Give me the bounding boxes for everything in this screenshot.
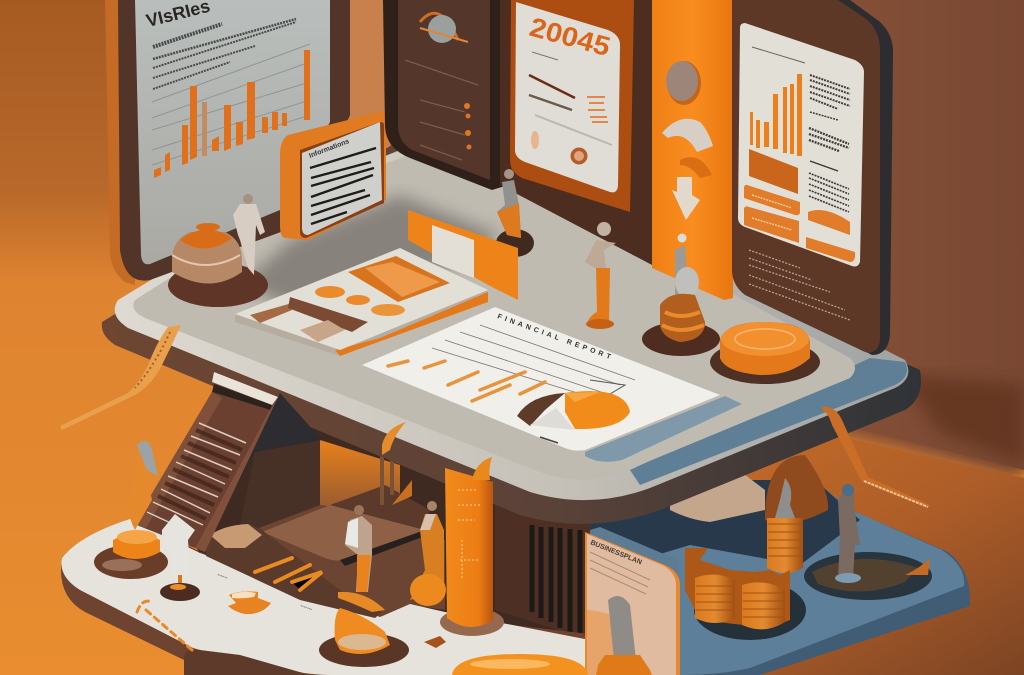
beige box [670, 474, 765, 522]
book with text: BUSINESSPLAN [589, 539, 643, 566]
stair band [134, 392, 270, 548]
control console [206, 524, 382, 618]
lower platform [61, 455, 970, 675]
interior below upper platform [200, 393, 600, 650]
monitor text lines [153, 19, 296, 89]
icon: curved arrow [662, 119, 713, 178]
document heading: FINANCIAL REPORT [496, 313, 612, 361]
stair dark side [194, 393, 322, 553]
ribbon: left [60, 325, 181, 430]
figures and buttons on white deck: ••••••• [299, 603, 313, 613]
dark wall [238, 440, 320, 535]
orange ribbons [60, 325, 930, 508]
vent grille [532, 525, 580, 638]
coin tray with coins [685, 548, 806, 640]
orange lit wall [320, 440, 400, 520]
document with pie chart [362, 307, 720, 451]
book with text [585, 527, 680, 675]
button: left orange stack [94, 530, 168, 579]
ribbon: right [822, 407, 930, 508]
figure: standing man center [585, 222, 616, 329]
panel: left monitor [105, 0, 350, 285]
grey bottle on orange base [596, 596, 652, 675]
figures and buttons on top deck [168, 169, 820, 451]
report year: 20045 [526, 12, 613, 62]
figure: orange walker near top panel [496, 169, 534, 257]
panel: small orange note card: Informations [308, 138, 350, 160]
panel: small orange note card [280, 112, 386, 240]
button: central orange dome [319, 608, 409, 667]
lower platform white deck [61, 520, 640, 675]
panel: gauge panel [383, 0, 505, 190]
board text blocks [809, 75, 850, 212]
floor mat [262, 505, 425, 561]
orange coin stack tall [767, 478, 803, 573]
button: large orange dome at bottom [452, 654, 588, 675]
brown wall panel [495, 470, 595, 642]
upper platform [102, 130, 921, 524]
text snippets on deck: •••••• [216, 572, 228, 582]
right wing objects [452, 478, 932, 675]
dashboard card [235, 248, 488, 356]
panel: right infographic board [732, 0, 893, 355]
interior floor [205, 505, 445, 617]
orange cylinder with text [440, 457, 504, 636]
ribbon: center tab [382, 422, 406, 455]
platform gray layer [115, 130, 908, 500]
board card [738, 23, 864, 266]
panel: orange column with icons [652, 0, 733, 300]
monitor bar chart [154, 50, 310, 178]
figure: orange standing man [338, 505, 385, 612]
gauge [420, 13, 468, 43]
staircase [134, 372, 322, 553]
small orange mark [424, 636, 446, 648]
icon: round button [666, 61, 701, 105]
button: small orange stack [228, 591, 271, 614]
board orange tiles [749, 149, 798, 194]
lower platform blue wing [590, 480, 970, 675]
figure: woman with grey veil [129, 440, 158, 530]
figure and stack: grey on base [642, 234, 720, 356]
orange block with white tag [408, 210, 518, 300]
figure and stack: left [168, 194, 268, 307]
platform dark base [102, 140, 921, 524]
brown dome behind [765, 455, 828, 523]
ribbon on deck edge [137, 601, 192, 650]
figure: white cloak [160, 514, 200, 601]
support post [382, 450, 392, 505]
figures and buttons on white deck [94, 440, 504, 667]
board caption below card [749, 250, 850, 320]
figure: orange man at cylinder [410, 501, 446, 606]
button: orange disc [710, 322, 820, 384]
panel: 20045 report [500, 0, 652, 265]
figure: blue statue [804, 484, 932, 600]
interior backing [200, 393, 600, 650]
pie chart [517, 391, 630, 430]
board bar chart [750, 74, 802, 156]
icon: down arrow [672, 177, 700, 220]
